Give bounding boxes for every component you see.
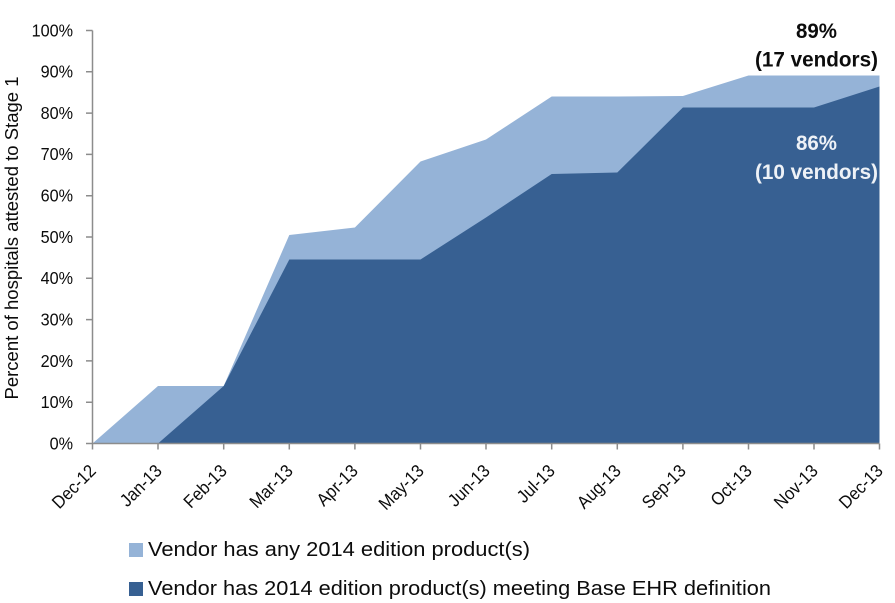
y-axis labels: 20% <box>41 351 73 371</box>
callout: 89% of hospitals, 17 vendors <box>755 20 878 72</box>
y-axis labels: 70% <box>41 144 73 164</box>
x-axis labels: Dec-13 <box>835 460 887 513</box>
x-axis labels: Mar-13 <box>245 460 297 512</box>
y-axis title: Percent of hospitals attested to Stage 1 <box>2 76 22 400</box>
area: vendor has any 2014 edition product <box>92 76 880 444</box>
legend item: Base EHR definition: Vendor has 2014 edition product(s) meeting Base EHR definition <box>148 577 771 600</box>
area: vendor has product meeting Base EHR definition <box>158 86 880 444</box>
x-axis labels: Nov-13 <box>770 460 822 513</box>
y-axis labels <box>32 21 73 454</box>
y-axis labels: 90% <box>41 62 73 82</box>
y-axis labels: 30% <box>41 310 73 330</box>
x-axis labels: Aug-13 <box>572 460 625 513</box>
x-axis labels: Jun-13 <box>443 460 494 511</box>
x-axis labels: Jul-13 <box>512 460 559 507</box>
x-axis labels: Jan-13 <box>115 460 166 511</box>
callout: 86% of hospitals, 10 vendors <box>755 132 878 184</box>
y-axis labels: 40% <box>41 268 73 288</box>
legend item: any 2014 edition product: Vendor has any 2014 edition product(s) <box>148 538 530 561</box>
y-axis labels: 10% <box>41 392 73 412</box>
callout: 89% of hospitals, 17 vendors: 89% <box>796 20 837 43</box>
y-axis labels: 0% <box>50 434 73 454</box>
axes and tick marks <box>86 30 880 450</box>
x-axis labels <box>48 460 887 514</box>
callout: 86% of hospitals, 10 vendors: 86% <box>796 132 837 155</box>
y-axis labels: 60% <box>41 186 73 206</box>
y-axis labels: 80% <box>41 103 73 123</box>
x-axis labels: Feb-13 <box>179 460 231 512</box>
x-axis labels: Oct-13 <box>706 460 756 510</box>
y-axis labels: 50% <box>41 227 73 247</box>
x-axis labels: May-13 <box>374 460 428 514</box>
x-axis labels: Sep-13 <box>637 460 690 513</box>
callout: 89% of hospitals, 17 vendors: (17 vendors) <box>755 48 878 72</box>
x-axis labels: Dec-12 <box>48 460 100 513</box>
y-axis labels: 100% <box>32 21 73 41</box>
callout: 86% of hospitals, 10 vendors: (10 vendors) <box>755 161 878 184</box>
x-axis labels: Apr-13 <box>312 460 362 510</box>
legend <box>129 538 771 600</box>
